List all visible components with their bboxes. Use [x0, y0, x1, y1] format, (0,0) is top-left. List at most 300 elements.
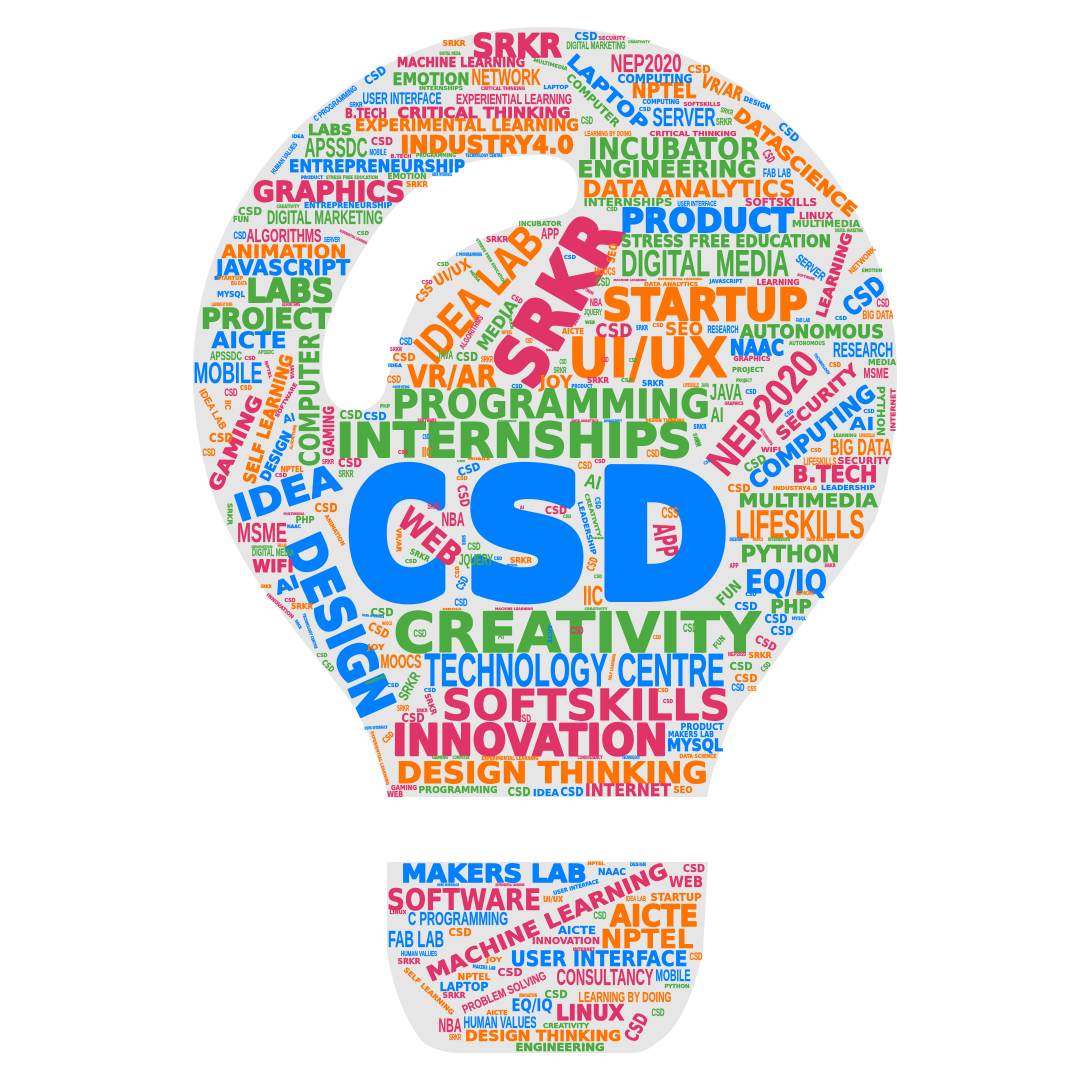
- words: small keywords around big CSD and lower keywords: CSD: [456, 476, 468, 482]
- word: NPTEL: NPTEL: [632, 79, 696, 103]
- word: WEB rotated: WEB: [390, 499, 470, 575]
- words: small keywords in upper bulb: SRKR: [442, 39, 466, 48]
- words: small keywords on the right of bulb: PYTHON: [874, 386, 887, 436]
- words: small keywords in upper bulb: SRKR: [338, 469, 354, 480]
- words: small keywords in upper bulb: BIG DATA: [231, 281, 247, 287]
- word: RESEARCH: RESEARCH: [833, 339, 893, 362]
- word: GAMING rotated: GAMING: [204, 392, 268, 495]
- words: small keywords inside the inner disc: UI/UX: [430, 254, 474, 290]
- words: small keywords inside the inner disc: SRKR: [546, 348, 559, 352]
- word: SOFTSKILLS: SOFTSKILLS: [442, 681, 730, 731]
- words: small keywords in upper bulb: TECHNOLOGY CENTRE: [466, 153, 503, 158]
- words: small keywords on the right of bulb: CSD: [734, 672, 758, 685]
- words: small keywords inside the inner disc: SRKR: [572, 314, 582, 326]
- words: small keywords inside the inner disc: IDEA: [388, 363, 403, 368]
- words: small keywords on the right of bulb: MOOCS: [753, 537, 763, 542]
- words: small keywords on the right of bulb: USER INTERFACE: [678, 201, 717, 208]
- words: small keywords on the right of bulb: CSD: [876, 296, 890, 310]
- words: small keywords on the right of bulb: COMPUTING: [618, 72, 692, 86]
- word: DIGITAL MEDIA: DIGITAL MEDIA: [621, 243, 789, 284]
- words: small keywords on the right of bulb: MEDIA: [868, 358, 897, 367]
- words: bulb base word cloud: SRKR: [449, 1033, 461, 1042]
- words: small keywords in upper bulb: CRITICAL THINKING: [481, 86, 525, 91]
- words: small keywords on the right of bulb: APP: [730, 563, 739, 570]
- words: small keywords around big CSD and lower keywords: CSD: [454, 597, 468, 609]
- words: small keywords inside the inner disc: CSD: [629, 358, 637, 364]
- words: small keywords on the right of bulb: NEP2020: [728, 652, 746, 658]
- words: small keywords around big CSD and lower keywords: CSD: [414, 628, 427, 640]
- words: small keywords around big CSD and lower keywords: CSD: [453, 484, 472, 508]
- words: small keywords inside the inner disc: JAVA: [437, 348, 453, 362]
- words: small keywords around big CSD and lower keywords: AICTE: [546, 625, 552, 643]
- words: small keywords inside the inner disc: ALGORITHMS: [458, 313, 486, 351]
- words: small keywords inside the inner disc: CSD: [456, 350, 478, 364]
- words: small keywords around big CSD and lower keywords: MYSQL: [506, 563, 518, 567]
- words: small keywords on the right of bulb: FAB LAB: [763, 166, 791, 180]
- words: small keywords on the right of bulb: SRKR: [716, 117, 732, 128]
- words: small keywords on the right of bulb: LEARNING: [834, 433, 856, 438]
- words: small keywords on the right of bulb: EMOTION: [862, 268, 882, 273]
- words: small keywords in upper bulb: CSD: [244, 356, 256, 362]
- word: ENTREPRENEURSHIP small: ENTREPRENEURSHIP: [304, 201, 392, 210]
- word: AI rotated: AI: [272, 571, 302, 599]
- words: small keywords inside the inner disc: CSD: [602, 357, 608, 364]
- words: small keywords around big CSD and lower keywords: CSD: [405, 559, 417, 565]
- words: small keywords in upper bulb: SERVER: [324, 237, 340, 244]
- words: small keywords in upper bulb: DIGITAL MEDIA: [440, 51, 461, 56]
- words: bulb base word cloud: CSD: [544, 988, 568, 1001]
- words: small keywords on the right of bulb: DIGITAL MARKETING: [835, 228, 863, 233]
- words: small keywords inside the inner disc: CSD: [422, 433, 430, 441]
- words: bulb base word cloud: AICTE: [558, 924, 596, 937]
- words: small keywords in upper bulb: MYSQL: [217, 290, 245, 299]
- words: small keywords on the right of bulb: CSD: [770, 624, 794, 638]
- words: small keywords in lower left bulb: EXPERIENTIAL LEARNING: [369, 730, 391, 786]
- words: small keywords in lower left bulb: CSD: [663, 699, 673, 705]
- words: small keywords around big CSD and lower keywords: FUN: [713, 577, 745, 609]
- words: small keywords on the right of bulb: SRKR: [748, 651, 772, 660]
- words: bulb base word cloud: AICTE: [486, 1009, 508, 1017]
- words: small keywords in upper bulb: CREATIVITY: [276, 204, 300, 209]
- words: small keywords in lower left bulb: USER INTERFACE: [364, 724, 388, 731]
- words: small keywords in lower left bulb: CSD: [402, 711, 425, 725]
- words: small keywords inside the inner disc: SEO: [604, 242, 621, 264]
- words: small keywords inside the inner disc: CSD: [512, 384, 523, 390]
- words: small keywords in upper bulb: CSD: [202, 447, 216, 459]
- words: small keywords on the right of bulb: CSD: [759, 147, 778, 165]
- words: small keywords inside the inner disc: SRKR: [481, 355, 493, 364]
- words: small keywords on the right of bulb: SOFTSKILLS: [745, 196, 817, 209]
- words: bulb base word cloud: CSD: [652, 1007, 665, 1019]
- words: small keywords in upper bulb: CSD: [364, 410, 386, 423]
- words: small keywords in lower left bulb: CSD: [560, 785, 584, 799]
- words: small keywords in upper bulb: CSD: [224, 387, 238, 399]
- large CSD title word: S: [465, 438, 589, 636]
- words: bulb base word cloud: USER INTERFACE: [437, 883, 459, 887]
- words: small keywords inside the inner disc: [387, 220, 703, 441]
- words: bulb base word cloud: JOY: [485, 956, 503, 964]
- word: LINUX: LINUX: [556, 1001, 624, 1025]
- words: main bulb large keywords: [194, 27, 893, 801]
- word: PROJECT: PROJECT: [201, 302, 331, 335]
- words: small keywords around big CSD and lower keywords: CREATIVITY: [583, 493, 602, 539]
- words: small keywords in lower left bulb: CSD: [387, 683, 399, 689]
- word: JQUERY: JQUERY: [459, 552, 493, 569]
- words: small keywords in lower left bulb: CSD: [508, 785, 531, 799]
- words: small keywords around big CSD and lower keywords: AI: [498, 630, 504, 642]
- word: GRAPHICS: GRAPHICS: [253, 175, 405, 208]
- words: small keywords around big CSD and lower keywords: CSD: [398, 450, 408, 456]
- word: AICTE: AICTE: [610, 899, 698, 933]
- words: small keywords in upper bulb: CSD: [371, 135, 393, 148]
- words: small keywords in lower left bulb: DATA SCIENCE: [680, 754, 717, 760]
- words: small keywords inside the inner disc: CSD: [564, 255, 576, 261]
- word: SRKR rotated lower: SRKR: [395, 669, 423, 703]
- words: small keywords in lower left bulb: SEO: [674, 785, 692, 796]
- words: bulb base word cloud: NAAC: [598, 867, 626, 878]
- word: LIFESKILLS: LIFESKILLS: [736, 503, 864, 547]
- word: EXPERIENTIAL LEARNING: EXPERIENTIAL LEARNING: [456, 91, 572, 108]
- words: small keywords inside the inner disc: INCUBATOR: [518, 220, 562, 228]
- words: small keywords on the right of bulb: DESIGN: [730, 537, 742, 542]
- words: small keywords inside the inner disc: SRKR: [507, 314, 515, 330]
- word: LAPTOP rotated: LAPTOP: [563, 50, 652, 136]
- words: small keywords around big CSD and lower keywords: CSD: [545, 504, 567, 517]
- words: bulb base word cloud: SRKR: [442, 991, 466, 1000]
- words: small keywords around big CSD and lower keywords: CSD: [570, 625, 584, 637]
- words: small keywords on the right of bulb: PROJECT: [732, 366, 764, 374]
- words: small keywords inside the inner disc: CSS: [413, 281, 436, 305]
- words: small keywords in upper bulb: SOFTWARE: [275, 382, 299, 419]
- word: NBA: NBA: [438, 1016, 462, 1037]
- words: small keywords in lower left bulb: CSD: [658, 688, 669, 694]
- words: small keywords on the right of bulb: MULTIMEDIA: [792, 219, 860, 230]
- words: small keywords in upper bulb: SRKR: [406, 180, 428, 189]
- words: small keywords inside the inner disc: CSD: [526, 338, 532, 345]
- words: small keywords in lower left bulb: CSD: [366, 619, 392, 642]
- word: DIGITAL MEDIA small: DIGITAL MEDIA: [252, 547, 294, 559]
- words: small keywords on the right of bulb: CSD: [759, 660, 773, 674]
- words: small keywords on the right of bulb: AI: [710, 404, 724, 427]
- words: small keywords on the right of bulb: FAB LAB: [796, 318, 810, 324]
- words: small keywords around big CSD and lower keywords: AI: [520, 505, 524, 510]
- words: small keywords on the right of bulb: NETWORK: [796, 591, 814, 597]
- words: small keywords inside the inner disc: DATA ANALYTICS: [644, 282, 698, 288]
- words: small keywords on the right of bulb: MSME: [864, 365, 888, 382]
- light bulb silhouette: [193, 27, 897, 797]
- words: small keywords in lower left bulb: CSD: [517, 713, 531, 725]
- words: small keywords in upper bulb: CSD: [361, 63, 389, 88]
- words: bulb base word cloud: WEB: [669, 873, 703, 891]
- words: small keywords on the right of bulb: CSD: [784, 408, 796, 419]
- word: CSS: CSS: [662, 505, 679, 522]
- words: small keywords in upper bulb: SRKR: [226, 503, 234, 526]
- words: small keywords inside the inner disc: DATA ANALYTICS: [572, 419, 599, 423]
- words: small keywords inside the inner disc: STRESS FREE EDUCATION: [475, 237, 507, 285]
- words: small keywords in upper bulb: B.TECH: [390, 154, 412, 160]
- words: bulb base word cloud: DESIGN: [630, 862, 646, 867]
- words: small keywords in upper bulb: STRESS FREE EDUCATION: [326, 175, 378, 180]
- word: MULTIMEDIA: MULTIMEDIA: [738, 490, 878, 512]
- words: small keywords on the right of bulb: CRITICAL THINKING: [650, 130, 737, 138]
- words: small keywords around big CSD and lower keywords: FUN: [711, 634, 727, 651]
- words: small keywords on the right of bulb: DESIGN: [742, 95, 771, 112]
- words: small keywords around big CSD and lower keywords: CSD: [563, 514, 572, 519]
- words: small keywords on the right of bulb: GRAPHICS: [734, 355, 770, 363]
- words: small keywords inside the inner disc: NPTEL: [502, 330, 513, 335]
- word: ENGINEERING: ENGINEERING: [578, 158, 756, 183]
- words: small keywords inside the inner disc: JAVASCRIPT: [603, 419, 622, 423]
- words: bulb base word cloud: NPTEL: [588, 861, 605, 866]
- words: small keywords in lower left bulb: USER INTERFACE: [362, 613, 384, 619]
- words: small keywords in upper bulb: SRKR: [350, 102, 362, 109]
- words: small keywords around big CSD and lower keywords: CSD: [455, 566, 461, 578]
- word: PROGRAMMING small: PROGRAMMING: [418, 785, 498, 796]
- words: small keywords in upper bulb: CSD: [338, 456, 362, 470]
- words: small keywords in upper bulb: AI: [282, 411, 297, 426]
- words: small keywords on the right of bulb: PROJECT: [736, 378, 752, 383]
- word: PROGRAMMING: PROGRAMMING: [392, 382, 710, 428]
- words: bulb base word cloud: CREATIVITY: [543, 1022, 590, 1030]
- words: small keywords in upper bulb: CSD: [357, 231, 369, 237]
- words: small keywords in lower left bulb: [260, 584, 717, 799]
- words: small keywords on the right of bulb: TECHNOLOGY: [813, 352, 831, 376]
- words: bulb base word cloud: CSD: [683, 862, 705, 875]
- words: small keywords in upper bulb: INNOVATION: [252, 545, 273, 549]
- word: INDUSTRY4.0: INDUSTRY4.0: [400, 131, 574, 159]
- bulb base silhouette: [387, 862, 708, 1053]
- words: small keywords on the right of bulb: SECURITY: [838, 456, 891, 467]
- word: DATA rotated: DATA: [729, 104, 788, 157]
- words: small keywords inside the inner disc: PRODUCT: [572, 384, 593, 390]
- words: small keywords inside the inner disc: SRKR: [642, 379, 664, 388]
- words: small keywords on the right of bulb: CSD: [741, 451, 769, 475]
- word: STRESS FREE EDUCATION: STRESS FREE EDUCATION: [621, 232, 831, 252]
- words: small keywords around big CSD and lower keywords: CSD: [494, 556, 503, 561]
- words: small keywords on the right of bulb: CSD: [810, 448, 822, 454]
- words: small keywords in lower left bulb: EXPERIMENTAL LEARNING: [482, 756, 538, 762]
- word: MACHINE LEARNING top: MACHINE LEARNING: [397, 56, 525, 71]
- word: PRODUCT: PRODUCT: [680, 722, 724, 733]
- words: small keywords inside the inner disc: MEDIA: [469, 269, 482, 284]
- words: small keywords around big CSD and lower keywords: CSD: [456, 460, 482, 479]
- words: small keywords on the right of bulb: CSD: [730, 660, 752, 673]
- words: small keywords in upper bulb: NAAC: [287, 524, 301, 529]
- word: COMPUTING rotated: COMPUTING: [744, 380, 881, 495]
- word: MYSQL: MYSQL: [667, 736, 723, 756]
- words: small keywords on the right of bulb: LIFESKILLS: [859, 433, 875, 438]
- words: small keywords in upper bulb: USER INTERFACE: [432, 172, 452, 177]
- words: small keywords on the right of bulb: SRKR: [824, 563, 836, 568]
- words: small keywords on the right of bulb: CSD: [574, 30, 598, 43]
- word: MACHINE LEARNING rotated: MACHINE LEARNING: [423, 858, 671, 986]
- words: small keywords in upper bulb: INTERNSHIPS: [419, 86, 463, 92]
- word: INTERNET: INTERNET: [585, 781, 671, 801]
- words: small keywords around big CSD and lower keywords: MACHINE LEARNING: [495, 607, 533, 611]
- word: CENTRE: CENTRE: [618, 644, 724, 696]
- words: small keywords inside the inner disc: WEB: [585, 320, 595, 325]
- words: small keywords in upper bulb: CSD: [340, 408, 363, 422]
- words: bulb base word cloud: [387, 858, 705, 1054]
- words: small keywords in lower left bulb: SRKR: [423, 692, 439, 716]
- words: small keywords inside the inner disc: CSD: [621, 378, 633, 384]
- words: bulb base word cloud: LINUX: [390, 910, 407, 916]
- words: small keywords around big CSD and lower keywords: LEADERSHIP: [576, 501, 597, 556]
- words: small keywords in upper bulb: PHP: [380, 404, 390, 410]
- words: bulb base word cloud: EXPERIENTIAL LEARNING: [496, 883, 525, 887]
- words: small keywords on the right of bulb: DATA ANALYTICS: [806, 537, 834, 542]
- words: small keywords on the right of bulb: RESEARCH: [708, 324, 739, 336]
- words: small keywords in upper bulb: CSD: [314, 501, 338, 515]
- word: MSME: MSME: [237, 517, 287, 548]
- word: PRODUCT: PRODUCT: [620, 201, 794, 240]
- word: AICTE: AICTE: [212, 329, 286, 354]
- words: small keywords on the right of bulb: CSD: [728, 482, 750, 495]
- words: small keywords on the right of bulb: INTERNET: [890, 388, 898, 432]
- words: small keywords in lower left bulb: CSD: [320, 658, 336, 674]
- words: small keywords on the right of bulb: SRKR: [694, 423, 707, 431]
- words: small keywords in upper bulb: CSD: [209, 431, 233, 445]
- words: bulb base word cloud: STARTUP: [650, 891, 702, 904]
- words: small keywords inside the inner disc: C PROGRAMMING: [456, 252, 482, 257]
- words: small keywords inside the inner disc: SRKR: [554, 366, 567, 375]
- words: small keywords on the right of bulb: INTERNSHIPS: [768, 537, 790, 542]
- word: LABS large: LABS: [246, 272, 334, 310]
- words: small keywords inside the inner disc: JOY: [538, 372, 573, 393]
- word: COMPUTER rotated: COMPUTER: [293, 334, 326, 466]
- words: small keywords around big CSD and lower keywords: SRKR: [408, 547, 431, 564]
- words: small keywords inside the inner disc: DESIGN THINKING: [646, 418, 684, 423]
- words: small keywords in upper bulb: PHP: [296, 515, 314, 526]
- word: SRKR top: SRKR: [472, 27, 562, 65]
- words: bulb base word cloud: INNOVATION: [532, 936, 600, 947]
- word: CONSULTANCY: CONSULTANCY: [556, 964, 654, 990]
- words: small keywords on the right of bulb: INDUSTRY4.0: [773, 486, 817, 492]
- words: small keywords inside the inner disc: CSD: [596, 320, 632, 342]
- words: small keywords on the right of bulb: GRAPHICS: [724, 401, 744, 406]
- words: small keywords around big CSD and lower keywords: CSD: [584, 555, 601, 573]
- words: small keywords in upper bulb: MOBILE: [370, 148, 387, 157]
- word: INCUBATOR: INCUBATOR: [588, 132, 760, 166]
- words: small keywords inside the inner disc: SRKR: [390, 347, 403, 353]
- words: small keywords around big CSD and lower keywords: CSD: [594, 459, 606, 465]
- words: small keywords around big CSD and lower keywords: SRKR: [592, 536, 605, 540]
- words: small keywords inside the inner disc: CSD: [437, 262, 449, 268]
- words: small keywords in lower left bulb: JOY: [366, 643, 385, 652]
- words: small keywords around big CSD and lower keywords: CSD: [567, 500, 575, 510]
- word: FAB LAB: FAB LAB: [388, 926, 444, 952]
- word: IDEA LAB: IDEA LAB: [404, 215, 553, 372]
- words: small keywords in upper bulb: IDEA LAB: [196, 387, 228, 432]
- words: small keywords on the right of bulb: CSD: [606, 207, 618, 213]
- words: small keywords in lower left bulb: TECHNOLOGY CENTRE: [301, 613, 319, 649]
- words: bulb base word cloud: SELF LEARNING: [402, 966, 456, 1017]
- words: small keywords on the right of bulb: INTERNSHIPS: [584, 196, 673, 209]
- words: small keywords inside the inner disc: NBA: [590, 297, 602, 309]
- words: small keywords around big CSD and lower keywords: SELF LEARNING: [607, 653, 617, 681]
- words: small keywords on the right of bulb: BIG DATA: [862, 308, 894, 322]
- word: ENGINEERING: ENGINEERING: [516, 1041, 604, 1054]
- words: bulb base word cloud: INTERNET: [573, 947, 595, 952]
- word: WIFI: WIFI: [252, 557, 294, 577]
- words: small keywords on the right of bulb: CREATIVITY: [628, 40, 650, 44]
- word: MAKERS LAB: MAKERS LAB: [668, 730, 714, 739]
- words: small keywords on the right of bulb: INTERNSHIPS: [759, 427, 774, 446]
- words: small keywords on the right of bulb: CSD: [732, 682, 745, 694]
- words: small keywords inside the inner disc: SOFTWARE: [418, 418, 437, 423]
- words: small keywords on the right of bulb: CSD: [746, 388, 757, 396]
- words: small keywords inside the inner disc: AUTONOMOUS: [498, 419, 516, 423]
- words: small keywords around big CSD and lower keywords: [390, 438, 745, 681]
- words: small keywords inside the inner disc: COMPUTING: [392, 385, 410, 389]
- word: AUTONOMOUS: AUTONOMOUS: [740, 321, 884, 343]
- words: small keywords around big CSD and lower keywords: CSD: [594, 574, 603, 579]
- words: small keywords on the right of bulb: SERVER: [793, 251, 829, 284]
- words: small keywords inside the inner disc: APP: [541, 226, 559, 243]
- word: EQ/IQ: EQ/IQ: [745, 563, 827, 601]
- words: small keywords in lower left bulb: CSD: [316, 653, 328, 659]
- words: small keywords on the right of bulb: CSD: [746, 592, 757, 598]
- words: small keywords in lower left bulb: INNOVATION: [265, 592, 295, 620]
- word: ANIMATION: ANIMATION: [222, 241, 346, 263]
- words: small keywords around big CSD and lower keywords: SRKR: [461, 535, 466, 545]
- words: small keywords in lower left bulb: CSD: [284, 598, 296, 604]
- large CSD title word: D: [596, 438, 728, 636]
- words: small keywords inside the inner disc: JQUERY: [584, 308, 602, 317]
- words: small keywords inside the inner disc: CSD: [652, 323, 664, 329]
- words: small keywords on the right of bulb: SRKR: [691, 433, 700, 448]
- words: small keywords on the right of bulb: CSD: [775, 120, 802, 145]
- word: TECHNOLOGY: TECHNOLOGY: [424, 644, 608, 696]
- words: small keywords in upper bulb: FAB LAB: [278, 543, 286, 548]
- words: small keywords on the right of bulb: CSD: [764, 612, 788, 626]
- words: small keywords around big CSD and lower keywords: CSD: [683, 621, 697, 635]
- words: small keywords around big CSD and lower keywords: SRKR: [694, 438, 702, 448]
- words: small keywords inside the inner disc: SRKR: [636, 324, 648, 332]
- words: small keywords inside the inner disc: SOFTWARE: [579, 284, 595, 296]
- word: VR/AR: VR/AR: [408, 360, 496, 395]
- words: small keywords inside the inner disc: MACHINE LEARNING: [614, 278, 647, 282]
- words: small keywords in upper bulb: EMOTION: [388, 172, 426, 181]
- words: small keywords around big CSD and lower keywords: SRKR: [428, 502, 441, 511]
- words: small keywords around big CSD and lower keywords: CSD: [468, 541, 481, 553]
- words: small keywords inside the inner disc: MOOCS: [594, 266, 616, 278]
- word: INNOVATION: INNOVATION: [392, 716, 668, 766]
- word: ALGORITHMS: ALGORITHMS: [246, 226, 322, 246]
- words: bulb base word cloud: CSD: [690, 951, 703, 963]
- word: UI/UX: UI/UX: [568, 326, 728, 390]
- words: small keywords on the right of bulb: AUTONOMOUS: [789, 341, 825, 347]
- words: small keywords around big CSD and lower keywords: MOBILE: [468, 457, 491, 461]
- words: small keywords in upper bulb: CSD: [238, 205, 262, 218]
- word: NPTEL: NPTEL: [600, 925, 694, 955]
- words: small keywords on the right of bulb: DIGITAL MARKETING: [566, 40, 626, 52]
- word: STARTUP: STARTUP: [602, 280, 808, 331]
- words: bulb base word cloud: USER INTERFACE: [553, 879, 600, 897]
- words: small keywords in upper bulb: NPTEL: [280, 465, 304, 474]
- words: small keywords in upper bulb: ANIMATION: [323, 514, 346, 547]
- words: bulb base word cloud: MAKERS LAB: [472, 964, 496, 972]
- words: small keywords on the right of bulb: AI: [850, 414, 874, 435]
- words: small keywords on the right of bulb: SOFTSKILLS: [684, 102, 721, 108]
- large CSD title word: [348, 438, 728, 636]
- word: LABS: LABS: [308, 121, 352, 139]
- words: small keywords on the right of bulb: SOFTWARE: [797, 273, 816, 281]
- words: small keywords in lower left bulb: TECHNOLOGY: [622, 755, 640, 760]
- words: small keywords inside the inner disc: CSD: [422, 280, 433, 286]
- word: SCIENCE rotated: SCIENCE: [773, 141, 861, 221]
- words: small keywords on the right of bulb: WIFI: [761, 446, 781, 454]
